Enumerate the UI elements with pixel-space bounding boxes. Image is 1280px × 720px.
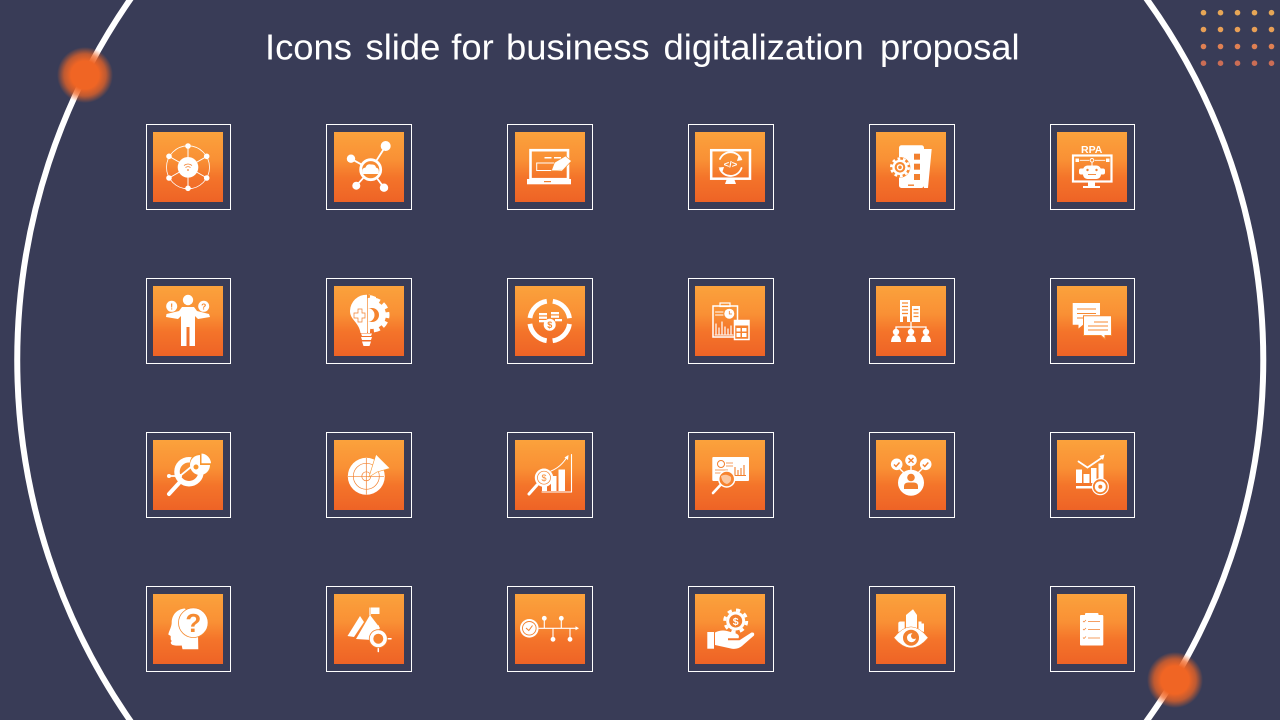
glow: bottom right: [1147, 652, 1203, 708]
glow: top left: [57, 47, 113, 103]
tile: clipboard report and calculator: [688, 278, 774, 364]
tile: code monitor: [688, 124, 774, 210]
title: for: [451, 26, 494, 67]
icon: hand holding money gear: $: [733, 616, 739, 628]
dot grid: [1201, 10, 1274, 66]
icon: wifi network: [166, 143, 210, 191]
icon: bulb and gear: [350, 294, 388, 346]
tile: eye with city: [870, 586, 954, 672]
tile: RPA robot: [1050, 124, 1134, 210]
tile: organization chart: [870, 278, 954, 364]
icon: magnifier with pie chart: [167, 453, 212, 494]
tile: checklist clipboard: [1050, 586, 1134, 672]
icon: organization chart: [891, 300, 931, 342]
icon: head with question: ?: [185, 608, 201, 638]
icon: mobile settings: [890, 145, 932, 188]
tile: performance chart with medal: [1050, 432, 1134, 518]
title: Icons: [265, 26, 352, 67]
title: slide: [366, 26, 440, 67]
icon: person weighing questions: !: [170, 302, 173, 312]
icon: person weighing questions: ?: [201, 302, 206, 312]
icon: code monitor: </>: [724, 160, 738, 170]
icon: cloud network: [347, 141, 391, 192]
icon: money cycle: $: [547, 320, 552, 330]
icon: RPA robot: RPA: [1081, 144, 1103, 156]
icon: checklist clipboard: [1080, 613, 1103, 646]
tile: wifi network: [146, 124, 230, 210]
title: business: [506, 26, 650, 67]
title: proposal: [880, 26, 1020, 67]
tile: financial growth search: [508, 432, 592, 518]
title: digitalization: [664, 26, 864, 67]
tile: person weighing questions: [146, 278, 230, 364]
icon: radar target: [348, 454, 390, 495]
icon: person weighing questions: [166, 295, 210, 346]
tile: hand holding money gear: [688, 586, 774, 672]
icon: timeline with clock: [520, 616, 579, 642]
tile: candidate evaluation: [870, 432, 954, 518]
icon: eye with city: [894, 609, 928, 648]
left white arc: [17, 0, 134, 720]
icon: chat bubbles: [1073, 303, 1112, 339]
icon: mountain goal: [348, 608, 391, 652]
tile: head with question: [146, 586, 230, 672]
tile: mountain goal: [326, 586, 412, 672]
tile: slide analysis: [688, 432, 774, 518]
tile: bulb and gear: [326, 278, 412, 364]
tile: laptop with pen: [508, 124, 592, 210]
tile: radar target: [326, 432, 412, 518]
tile: magnifier with pie chart: [146, 432, 230, 518]
icon: laptop with pen: [527, 150, 572, 184]
icon: candidate evaluation: [891, 454, 932, 496]
tile: money cycle: [508, 278, 592, 364]
icon: slide analysis: [712, 457, 749, 493]
tile: timeline with clock: [508, 586, 592, 672]
icon: clipboard report and calculator: [713, 303, 749, 340]
tile: cloud network: [326, 124, 412, 210]
icon: financial growth search: $: [541, 473, 547, 483]
tile: mobile settings: [870, 124, 954, 210]
right white arc: [1143, 0, 1263, 720]
tile: chat bubbles: [1050, 278, 1134, 364]
icon: performance chart with medal: [1076, 454, 1108, 495]
